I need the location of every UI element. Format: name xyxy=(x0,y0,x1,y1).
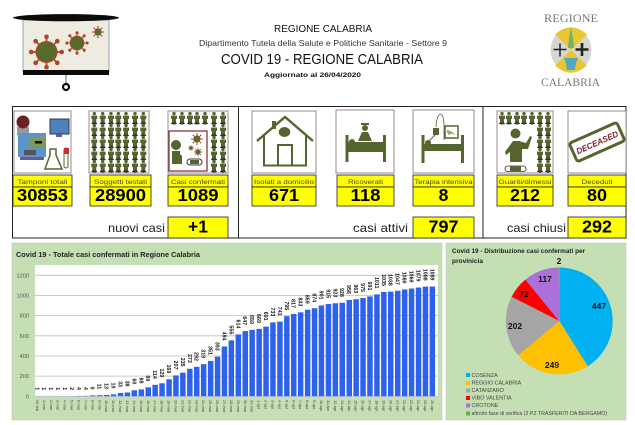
date axis labels: 18-apr xyxy=(375,400,380,412)
label: casi confermati: Casi confermati xyxy=(171,179,226,186)
date axis labels: 13-mar xyxy=(125,400,130,413)
pie value labels: 72 xyxy=(519,289,529,299)
pie value labels: 202 xyxy=(508,321,522,331)
date axis labels: 12-apr xyxy=(333,400,338,412)
card: deceduti xyxy=(568,111,626,206)
summary: casi chiusi: casi chiusi xyxy=(507,221,566,235)
summary: casi attivi: 797 xyxy=(428,216,458,236)
icon: recovered person xyxy=(497,111,553,173)
value: 118: 118 xyxy=(350,185,381,205)
y axis labels: 200 xyxy=(20,374,29,380)
bar value labels: 273 xyxy=(186,354,192,363)
bar value labels: 923 xyxy=(331,288,337,297)
card: soggetti testati xyxy=(89,111,151,206)
bar value labels: 38 xyxy=(123,381,129,387)
bar value labels: 13 xyxy=(103,383,109,389)
bar value labels: 1035 xyxy=(380,274,386,286)
logo: Regione Calabria: CALABRIA xyxy=(541,75,600,89)
bar value labels: 963 xyxy=(352,284,358,293)
date axis labels: 6-mar xyxy=(76,400,81,411)
icon: house xyxy=(252,111,316,173)
date axis labels xyxy=(35,400,435,413)
date axis labels: 11-apr xyxy=(326,400,331,412)
card: isolati a domicilio xyxy=(252,111,316,206)
card: ricoverati xyxy=(336,110,394,206)
date axis labels: 12-mar xyxy=(118,400,123,413)
legend: REGGIO CALABRIA xyxy=(472,380,522,386)
bar value labels: 1079 xyxy=(414,270,420,282)
bar value labels: 207 xyxy=(172,361,178,369)
bar value labels: 956 xyxy=(345,285,351,294)
value: 212: 212 xyxy=(510,185,540,205)
bar value labels: 1060 xyxy=(401,272,407,284)
bar value labels: 1011 xyxy=(373,277,379,288)
summary: casi chiusi: 292 xyxy=(582,216,612,236)
value: 30853: 30853 xyxy=(17,185,68,205)
bar value labels: 901 xyxy=(317,291,323,300)
date axis labels: 4-mar xyxy=(63,400,68,411)
update date: Aggiornato al 26/04/2020 xyxy=(264,72,361,79)
date axis labels: 16-mar xyxy=(146,400,151,413)
date axis labels: 22-apr xyxy=(402,400,407,412)
icon: deceased stamp: DECEASED xyxy=(575,129,620,156)
value: 28900: 28900 xyxy=(95,185,146,205)
date axis labels: 21-apr xyxy=(395,400,400,412)
pie chart title: Covid 19 - Distribuzione casi confermati per xyxy=(452,248,586,255)
summary: casi chiusi xyxy=(507,216,626,238)
icon: grid of people xyxy=(89,111,149,173)
bar value labels: 614 xyxy=(234,320,240,328)
bar value labels: 1 xyxy=(33,387,39,390)
pie value labels: 2 xyxy=(557,256,562,266)
pie value labels: 447 xyxy=(592,301,606,311)
label: terapia intensiva: Terapia intensiva xyxy=(414,179,473,186)
bar value labels: 2 xyxy=(68,387,74,390)
card: tamponi totali xyxy=(13,111,72,206)
date axis labels: 8-mar xyxy=(90,400,95,411)
chart title: Covid 19 - Totale casi confermati in Regione Calabria xyxy=(16,250,201,259)
bar value labels: 817 xyxy=(290,299,296,308)
bar value labels: 928 xyxy=(338,288,344,297)
bar value labels: 1 xyxy=(47,387,53,390)
bar value labels: 11 xyxy=(96,384,102,389)
legend: VIBO VALENTIA xyxy=(472,396,512,402)
date axis labels: 4-apr xyxy=(278,400,283,410)
panel: counters xyxy=(12,106,626,238)
date axis labels: 26-apr xyxy=(430,400,435,412)
date axis labels: 19-apr xyxy=(381,400,386,412)
bar value labels: 795 xyxy=(283,301,289,310)
value: 671: 671 xyxy=(269,185,299,205)
logo: Regione Calabria: REGIONE xyxy=(544,11,598,25)
bar value labels: 9 xyxy=(89,386,95,389)
date axis labels: 20-mar xyxy=(173,400,178,413)
bar value labels: 555 xyxy=(227,326,233,334)
bar value labels: 319 xyxy=(200,349,206,358)
bar value labels: 741 xyxy=(276,307,282,316)
date axis labels: 13-apr xyxy=(340,400,345,412)
date axis labels: 27-mar xyxy=(222,400,227,413)
date axis labels: 10-mar xyxy=(104,400,109,413)
bar value labels: 235 xyxy=(179,358,185,367)
bar value labels: 1 xyxy=(40,387,46,390)
date axis labels: 9-mar xyxy=(97,400,102,411)
date axis labels: 23-mar xyxy=(194,400,199,413)
date axis labels: 19-mar xyxy=(167,400,172,413)
bar value labels: 659 xyxy=(248,315,254,324)
bar value labels: 991 xyxy=(366,282,372,290)
bar value labels: 859 xyxy=(304,295,310,304)
pie chart xyxy=(506,268,613,374)
y axis labels: 1200 xyxy=(17,273,29,279)
y axis labels: 800 xyxy=(20,314,29,320)
y axis labels: 600 xyxy=(20,334,29,340)
icon: projector screen with viruses xyxy=(13,14,119,90)
date axis labels: 7-mar xyxy=(83,400,88,411)
bar value labels: 915 xyxy=(324,289,330,298)
date axis labels: 25-apr xyxy=(423,400,428,412)
date axis labels: 2-mar xyxy=(49,400,54,411)
summary: casi attivi xyxy=(353,216,474,238)
legend xyxy=(466,373,607,417)
panel: bar chart of total confirmed cases xyxy=(12,243,442,420)
date axis labels: 25-mar xyxy=(208,400,213,413)
date axis labels: 15-mar xyxy=(139,400,144,413)
summary: nuovi casi: +1 xyxy=(188,216,208,236)
bar value labels: 833 xyxy=(297,297,303,306)
header text block xyxy=(199,23,447,79)
bar value labels: 169 xyxy=(165,364,171,373)
icon: infected person xyxy=(168,111,228,173)
date axis labels: 17-mar xyxy=(153,400,158,413)
y axis labels xyxy=(17,273,29,400)
bar value labels: 1047 xyxy=(394,273,400,285)
department line: Dipartimento Tutela della Salute e Politiche Sanitarie - Settore 9 xyxy=(199,39,447,48)
y axis labels: 0 xyxy=(26,394,29,400)
date axis labels: 14-mar xyxy=(132,400,137,413)
date axis labels: 1-mar xyxy=(42,400,47,411)
pie value labels: 249 xyxy=(545,360,559,370)
bar value labels: 733 xyxy=(269,308,275,316)
date axis labels: 6-apr xyxy=(291,400,296,410)
date axis labels: 9-apr xyxy=(312,400,317,410)
bar value labels: 89 xyxy=(144,375,150,381)
date axis labels: 31-mar xyxy=(250,400,255,413)
bar value labels: 975 xyxy=(359,283,365,292)
bar value labels: 60 xyxy=(130,378,136,384)
label: isolati a domicilio: Isolati a domicilio xyxy=(254,179,314,186)
label: guariti/dimessi: Guariti/dimessi xyxy=(498,179,552,186)
summary: nuovi casi xyxy=(108,216,228,238)
y axis labels: 400 xyxy=(20,354,29,360)
bar value labels: 874 xyxy=(310,293,316,302)
bar value labels: 1 xyxy=(54,387,60,390)
date axis labels: 16-apr xyxy=(361,400,366,412)
date axis labels: 24-mar xyxy=(201,400,206,413)
date axis labels: 28-mar xyxy=(229,400,234,413)
date axis labels: 29-mar xyxy=(236,400,241,413)
bar value labels: 351 xyxy=(207,346,213,355)
date axis labels: 26-mar xyxy=(215,400,220,413)
icon: hospital bed with nurse xyxy=(336,110,394,173)
date axis labels: 15-apr xyxy=(354,400,359,412)
value: 8: 8 xyxy=(439,185,449,205)
date axis labels: 14-apr xyxy=(347,400,352,412)
logo: Regione Calabria xyxy=(541,11,600,89)
icon: intensive care bed xyxy=(413,110,474,173)
date axis labels: 5-apr xyxy=(284,400,289,410)
summary: casi attivi: casi attivi xyxy=(353,221,408,235)
legend: CATANZARO xyxy=(472,388,504,394)
bar value labels: 1088 xyxy=(421,269,427,281)
date axis labels: 3-mar xyxy=(56,400,61,411)
date axis labels: 17-apr xyxy=(368,400,373,412)
bar value labels: 691 xyxy=(262,312,268,321)
date axis labels: 22-mar xyxy=(187,400,192,413)
bar value labels: 669 xyxy=(255,314,261,323)
title: COVID 19 - REGIONE CALABRIA xyxy=(221,52,423,68)
bar value labels: 4 xyxy=(82,387,88,390)
date axis labels: 3-apr xyxy=(271,400,276,410)
label: tamponi totali: Tamponi totali xyxy=(18,179,68,186)
label: ricoverati: Ricoverati xyxy=(348,179,384,186)
bar value labels: 292 xyxy=(193,352,199,361)
label: soggetti testati: Soggetti testati xyxy=(94,179,148,186)
label: deceduti: Deceduti xyxy=(582,179,613,186)
bar value labels: 33 xyxy=(117,381,123,387)
pie value labels: 117 xyxy=(538,274,552,284)
date axis labels: 23-apr xyxy=(409,400,414,412)
date axis labels: 8-apr xyxy=(305,400,310,410)
card: casi confermati xyxy=(168,111,228,206)
value: 80: 80 xyxy=(587,185,607,205)
date axis labels: 7-apr xyxy=(298,400,303,410)
bar value labels: 68 xyxy=(137,377,143,383)
bar value labels: 494 xyxy=(220,332,226,341)
bar value labels: 647 xyxy=(241,316,247,325)
panel: pie chart by province xyxy=(446,243,626,420)
legend: altro/in fase di verifica (2 PZ TRASFERITI DA BERGAMO) xyxy=(472,411,607,417)
value: 1089: 1089 xyxy=(178,185,219,205)
bar value labels: 129 xyxy=(158,368,164,377)
date axis labels: 29-feb xyxy=(35,400,40,411)
date axis labels: 2-apr xyxy=(264,400,269,410)
bar value labels: 4 xyxy=(75,387,81,390)
date axis labels: 5-mar xyxy=(70,400,75,411)
pie chart title: provinicia xyxy=(452,258,484,265)
date axis labels: 11-mar xyxy=(111,400,116,413)
bars xyxy=(35,287,435,396)
bar value labels: 393 xyxy=(214,342,220,351)
bar value labels: 114 xyxy=(151,370,157,379)
bar value labels: 1069 xyxy=(407,271,413,283)
date axis labels: 24-apr xyxy=(416,400,421,412)
heading: region: REGIONE CALABRIA xyxy=(274,23,372,35)
date axis labels: 30-mar xyxy=(243,400,248,413)
summary: nuovi casi: nuovi casi xyxy=(108,221,165,235)
date axis labels: 10-apr xyxy=(319,400,324,412)
bar value labels: 1089 xyxy=(428,269,434,281)
date axis labels: 20-apr xyxy=(388,400,393,412)
pie value labels xyxy=(508,256,606,370)
icon: lab equipment xyxy=(14,111,71,173)
card: terapia intensiva xyxy=(413,110,474,206)
bar value labels: 1038 xyxy=(387,274,393,286)
date axis labels: 1-apr xyxy=(257,400,262,410)
date axis labels: 21-mar xyxy=(180,400,185,413)
legend: CROTONE xyxy=(472,403,499,409)
bar value labels: 19 xyxy=(110,382,116,388)
card: guariti/dimessi xyxy=(497,111,553,206)
bar value labels xyxy=(33,269,434,390)
legend: COSENZA xyxy=(472,373,498,379)
bar value labels: 1 xyxy=(61,387,67,390)
y axis labels: 1000 xyxy=(17,294,29,300)
date axis labels: 18-mar xyxy=(160,400,165,413)
